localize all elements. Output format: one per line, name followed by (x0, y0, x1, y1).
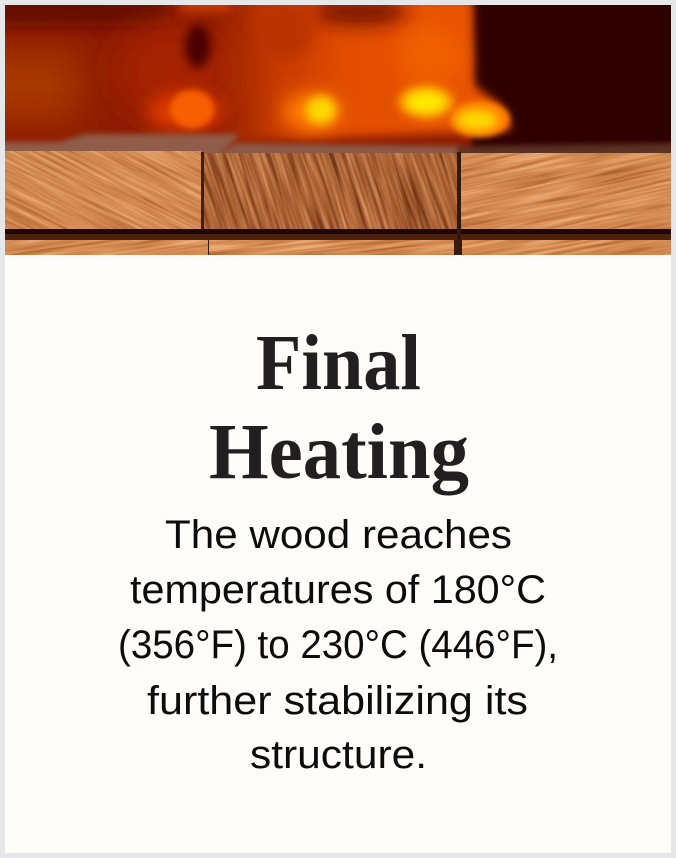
blurred fire background (0, 0, 676, 160)
body text: The wood reaches (165, 513, 512, 557)
heading (209, 320, 469, 496)
glowing embers (147, 86, 510, 137)
plank joints and gaps (5, 152, 671, 240)
body text (118, 513, 558, 777)
photo: wood planks in front of fire (5, 5, 671, 255)
body text: structure. (250, 733, 427, 777)
body text: further stabilizing its (147, 679, 528, 723)
heading: Final (256, 320, 421, 407)
heading: Heating (209, 409, 469, 496)
bottom row planks (5, 240, 671, 255)
top row planks (5, 151, 671, 229)
body text: (356°F) to 230°C (446°F), (118, 623, 558, 667)
body text: temperatures of 180°C (130, 568, 546, 612)
plank top surface (5, 130, 671, 153)
